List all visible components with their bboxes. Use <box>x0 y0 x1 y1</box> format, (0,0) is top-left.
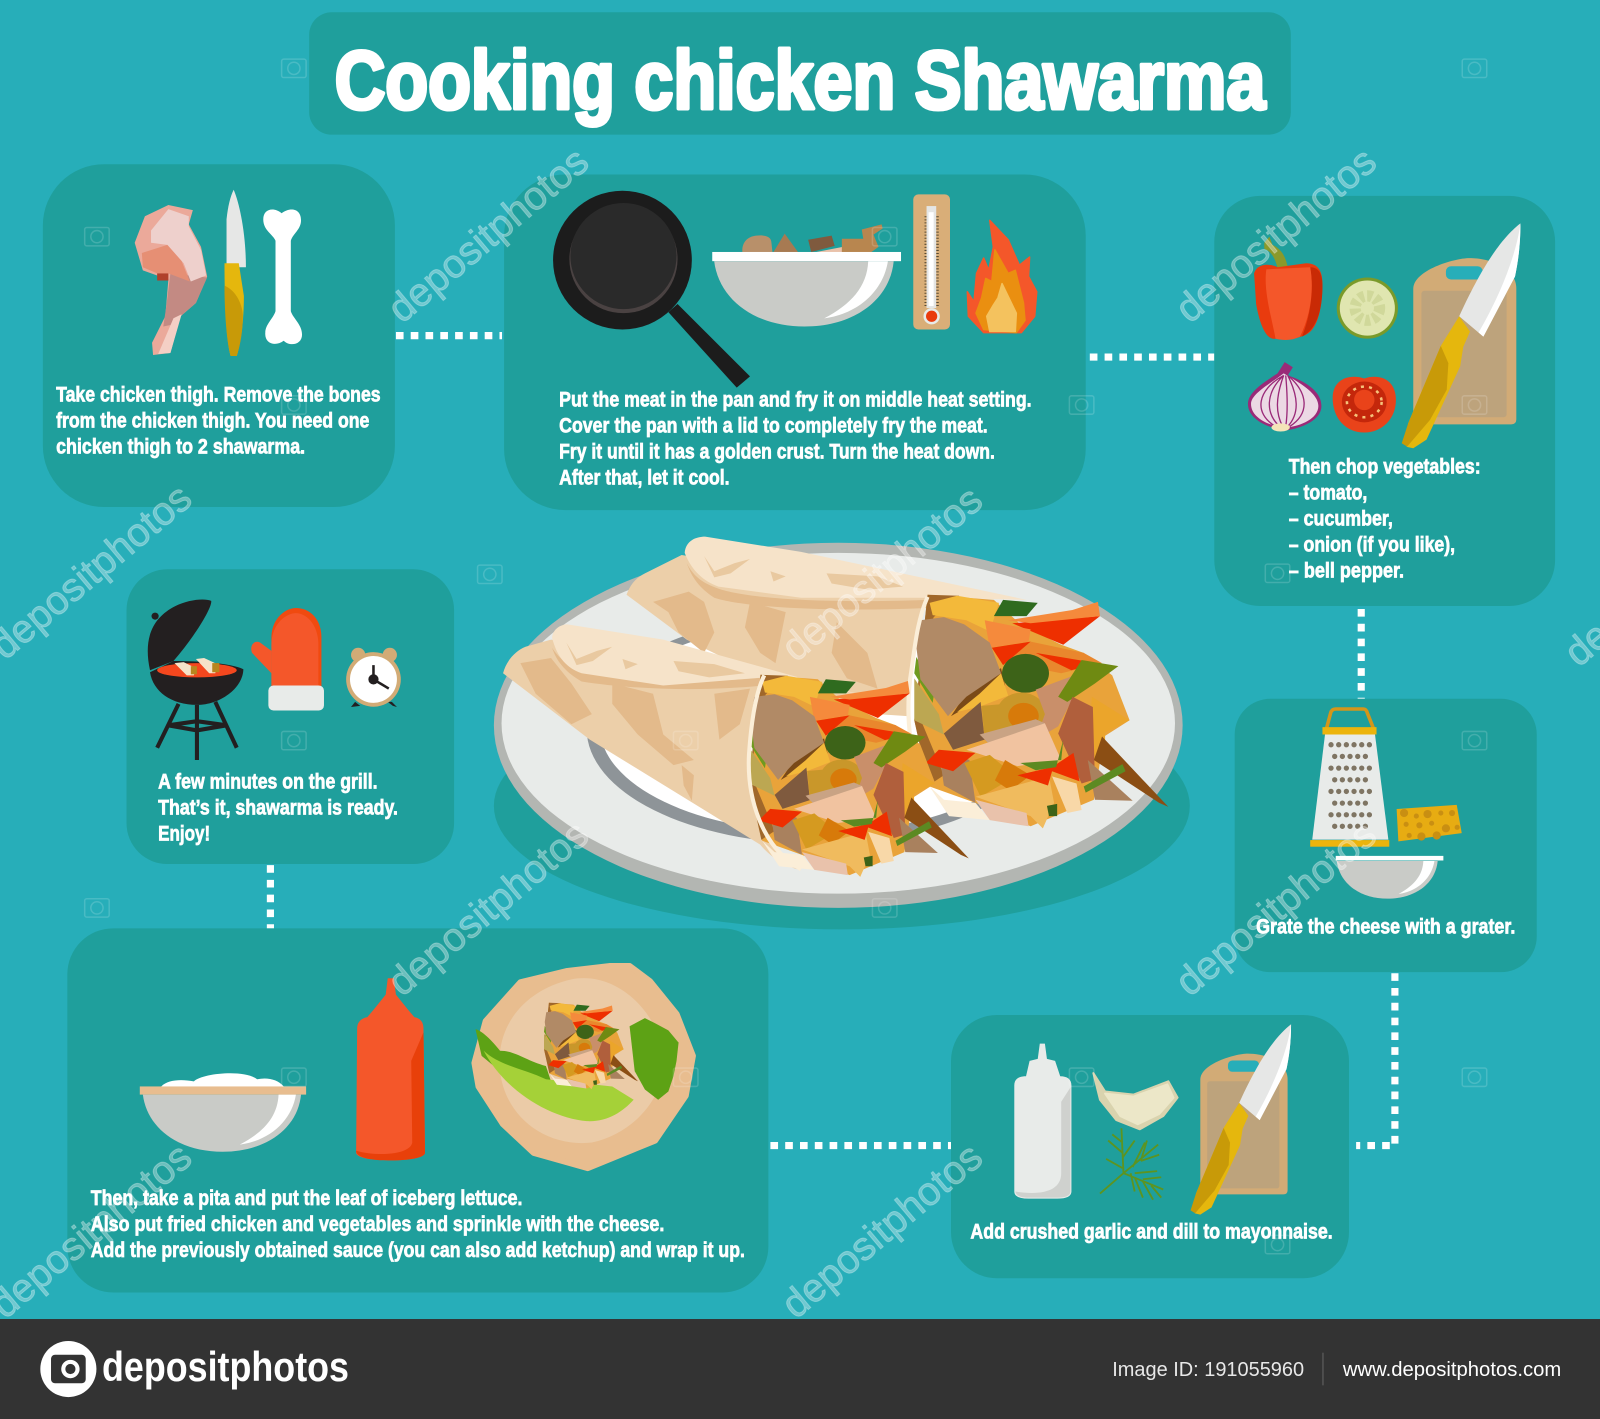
icon: frying pan <box>553 191 750 388</box>
step 1 text <box>56 383 381 458</box>
watermarks: depositphotos <box>773 478 991 670</box>
icon: dill sprig <box>1100 1128 1163 1200</box>
step 6 text: Then, take a pita and put the leaf of iceberg lettuce. <box>91 1187 522 1210</box>
icon: ketchup bottle <box>356 978 425 1160</box>
step 7 text <box>158 771 398 846</box>
icon: chicken thigh <box>135 205 207 355</box>
panel: step 1 chicken thigh <box>43 164 395 507</box>
step 1 text: from the chicken thigh. You need one <box>56 409 369 432</box>
icon: thermometer <box>913 194 950 330</box>
step 7 text: That’s it, shawarma is ready. <box>158 797 398 820</box>
step 1 text: chicken thigh to 2 shawarma. <box>56 435 305 458</box>
panel: step 4 grate cheese <box>1235 699 1537 972</box>
icon: cutting board and knife <box>1402 223 1520 448</box>
icon: bell pepper <box>1254 237 1322 340</box>
step 6 text <box>91 1187 745 1262</box>
panel: step 3 vegetables <box>1214 196 1555 606</box>
icon: kettle grill <box>148 599 243 760</box>
panel: step 7 grill <box>127 569 454 864</box>
footer bar <box>0 1319 1600 1419</box>
watermarks: depositphotos <box>1167 139 1385 331</box>
icon: oven mitt <box>251 608 324 711</box>
icon: mayonnaise bottle <box>1014 1044 1071 1199</box>
icon: onion <box>1248 362 1321 432</box>
watermarks: depositphotos <box>380 812 597 1005</box>
icon: pita with filling <box>474 966 693 1168</box>
icon: knife <box>224 190 246 356</box>
step 3 text: Then chop vegetables: <box>1289 455 1481 478</box>
icon: tomato <box>1333 377 1396 433</box>
depositphotos logo <box>40 1341 349 1397</box>
step 6 text: Also put fried chicken and vegetables and sprinkle with the cheese. <box>91 1213 664 1236</box>
panel: step 5 mayonnaise sauce <box>951 1015 1349 1278</box>
title banner <box>309 12 1291 135</box>
icon: flame <box>967 220 1037 333</box>
title: Cooking chicken Shawarma <box>335 34 1266 127</box>
step 2 text: Cover the pan with a lid to completely fry the meat. <box>559 415 988 438</box>
step 1 text: Take chicken thigh. Remove the bones <box>56 383 381 406</box>
step 3 text: – onion (if you like), <box>1289 533 1455 556</box>
step 7 text: A few minutes on the grill. <box>158 771 378 794</box>
step 2 text <box>559 389 1032 490</box>
watermarks: depositphotos <box>1167 812 1385 1005</box>
icon: small bowl <box>1336 856 1443 899</box>
step 4 text: Grate the cheese with a grater. <box>1256 915 1515 938</box>
panel: step 2 frying <box>504 174 1086 510</box>
icon: alarm clock <box>346 648 401 707</box>
step 7 text: Enjoy! <box>158 823 210 846</box>
divider <box>1322 1353 1323 1385</box>
icon: grater <box>1310 709 1389 847</box>
plate <box>494 543 1183 908</box>
step 5 text: Add crushed garlic and dill to mayonnaise. <box>970 1220 1333 1243</box>
step 2 text: Put the meat in the pan and fry it on middle heat setting. <box>559 389 1032 412</box>
step 3 text <box>1289 455 1481 582</box>
website: www.depositphotos.com <box>1342 1359 1561 1381</box>
step 3 text: – cucumber, <box>1289 507 1393 530</box>
depositphotos logo: depositphotos <box>102 1343 349 1390</box>
icon: bone <box>263 209 302 344</box>
step 2 text: After that, let it cool. <box>559 467 730 490</box>
back wrap <box>627 537 1168 828</box>
plate shadow <box>494 682 1190 929</box>
step 3 text: – bell pepper. <box>1289 559 1404 582</box>
icon: bowl of mayonnaise <box>140 1073 306 1152</box>
panel: step 6 wrap pita <box>67 928 768 1293</box>
icon: cutting board and knife <box>1191 1024 1291 1215</box>
central illustration: shawarma on plate <box>494 537 1190 929</box>
image id: Image ID: 191055960 <box>1112 1359 1304 1381</box>
step 6 text: Add the previously obtained sauce (you can also add ketchup) and wrap it up. <box>91 1239 745 1262</box>
icon: cheese <box>1397 805 1462 841</box>
watermarks: depositphotos <box>380 139 597 331</box>
icon: garlic clove <box>1093 1073 1178 1129</box>
icon: bowl with meat <box>712 224 901 326</box>
step 3 text: – tomato, <box>1289 481 1367 504</box>
watermarks: depositphotos <box>773 1135 991 1327</box>
icon: cucumber slice <box>1337 277 1398 339</box>
connectors <box>270 336 1395 1146</box>
front wrap <box>503 624 969 877</box>
step 2 text: Fry it until it has a golden crust. Turn the heat down. <box>559 441 995 464</box>
